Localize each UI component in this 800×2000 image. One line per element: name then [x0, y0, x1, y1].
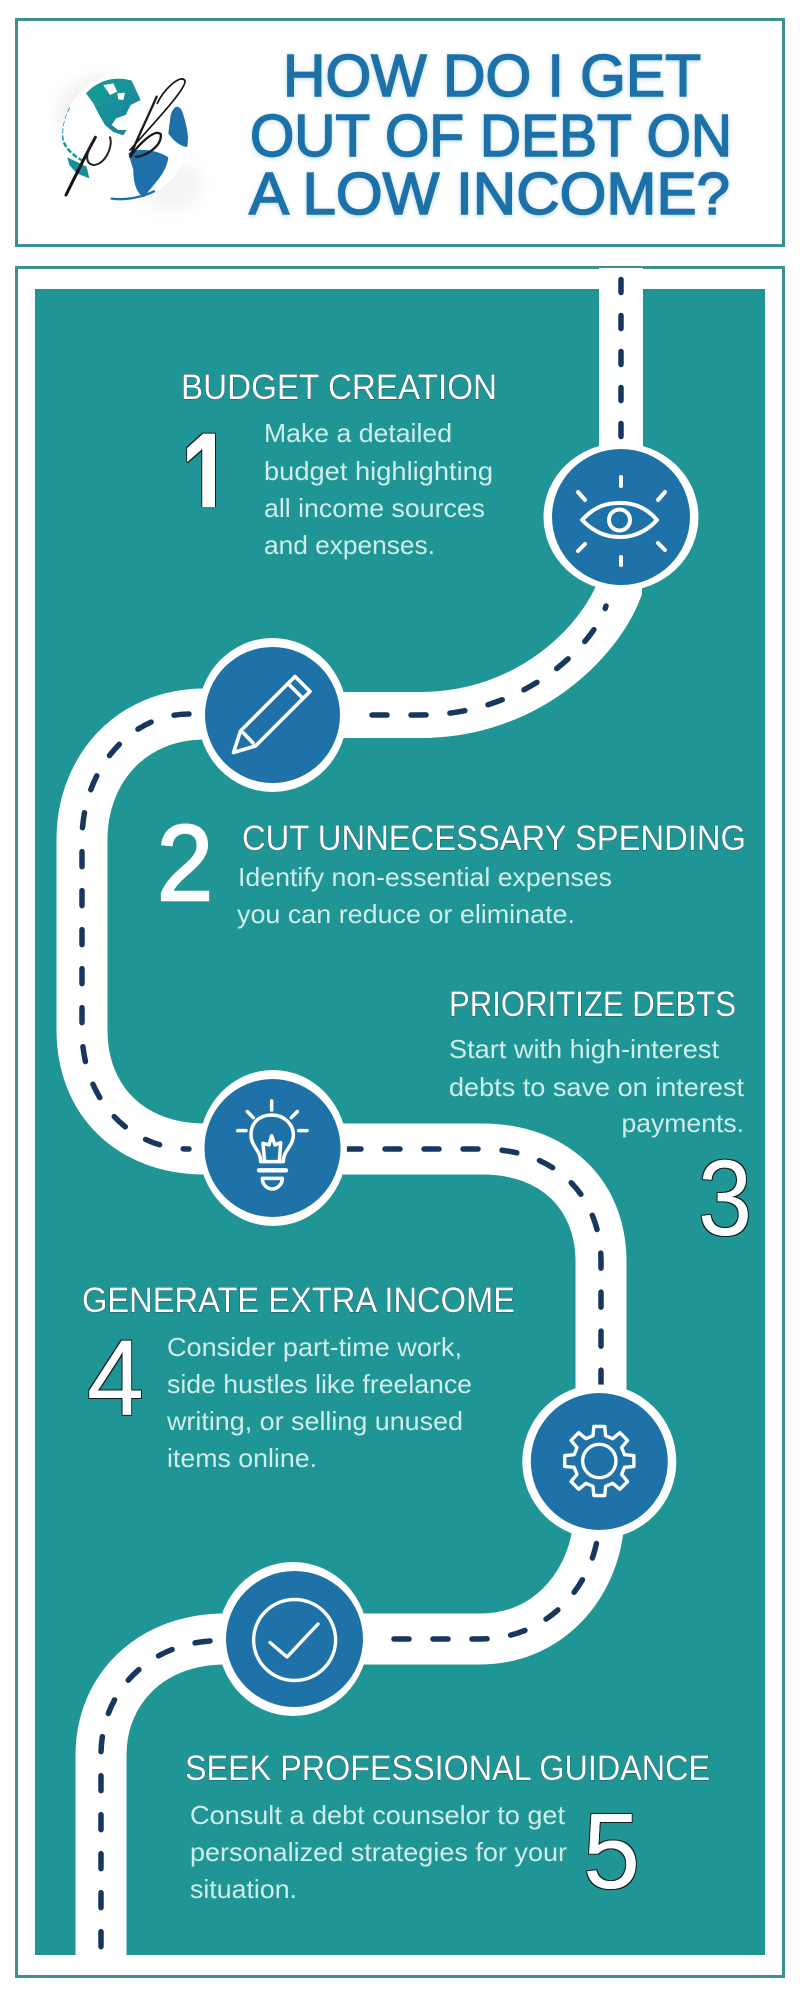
step 3: prioritize debts [199, 985, 752, 1258]
node 3 with lightbulb icon [199, 1070, 347, 1226]
body 5 [190, 1800, 567, 1904]
heading 2: CUT UNNECESSARY SPENDING [242, 819, 746, 858]
heading 4: GENERATE EXTRA INCOME [82, 1281, 515, 1320]
body 3 [449, 1034, 745, 1138]
step 1: budget creation [181, 368, 698, 591]
header panel [16, 20, 784, 246]
node 5 with checkmark icon [218, 1562, 368, 1716]
title: A LOW INCOME? [249, 161, 730, 227]
body 4: side hustles like freelance [167, 1369, 472, 1399]
body 4: writing, or selling unused [166, 1406, 463, 1436]
body 5: situation. [190, 1874, 297, 1904]
step 2: cut unnecessary spending [157, 638, 746, 929]
body 2 [237, 862, 612, 929]
icon: pencil [234, 676, 310, 752]
road dashes [82, 280, 621, 1966]
body 4: Consider part-time work, [167, 1332, 462, 1362]
winding road [82, 268, 621, 1975]
number 4: 4 [87, 1317, 144, 1438]
body 1: budget highlighting [264, 456, 493, 486]
body 1: Make a detailed [264, 418, 452, 448]
title [249, 43, 732, 227]
body 4 [166, 1332, 472, 1473]
body 3: debts to save on interest [449, 1072, 745, 1102]
body 1 [264, 418, 493, 560]
title: OUT OF DEBT ON [250, 103, 732, 169]
node 1 with eye icon [544, 443, 698, 591]
number 2: 2 [157, 802, 213, 923]
number 1: 1 [181, 407, 232, 550]
body 1: and expenses. [264, 530, 435, 560]
node 2 with pencil icon [198, 638, 347, 792]
logo: globe with signature [60, 78, 194, 204]
icon: gear [565, 1426, 634, 1496]
body 3: Start with high-interest [449, 1034, 720, 1064]
number 3: 3 [698, 1137, 752, 1258]
body 3: payments. [622, 1108, 744, 1138]
body 5: personalized strategies for your [190, 1837, 567, 1867]
heading 3: PRIORITIZE DEBTS [449, 985, 736, 1024]
body 2: you can reduce or eliminate. [237, 899, 575, 929]
icon: eye [578, 477, 665, 565]
body 2: Identify non-essential expenses [238, 862, 612, 892]
heading 1: BUDGET CREATION [181, 368, 497, 407]
number 5: 5 [583, 1790, 640, 1911]
icon: lightbulb [238, 1101, 307, 1189]
step 4: generate extra income [82, 1281, 676, 1538]
step 5: seek professional guidance [185, 1562, 710, 1911]
node 4 with gear icon [522, 1384, 676, 1538]
body 5: Consult a debt counselor to get [190, 1800, 566, 1830]
icon: checkmark in circle [254, 1600, 336, 1680]
body 1: all income sources [264, 493, 485, 523]
title: HOW DO I GET [283, 43, 701, 109]
heading 5: SEEK PROFESSIONAL GUIDANCE [185, 1749, 710, 1788]
body 4: items online. [167, 1443, 317, 1473]
